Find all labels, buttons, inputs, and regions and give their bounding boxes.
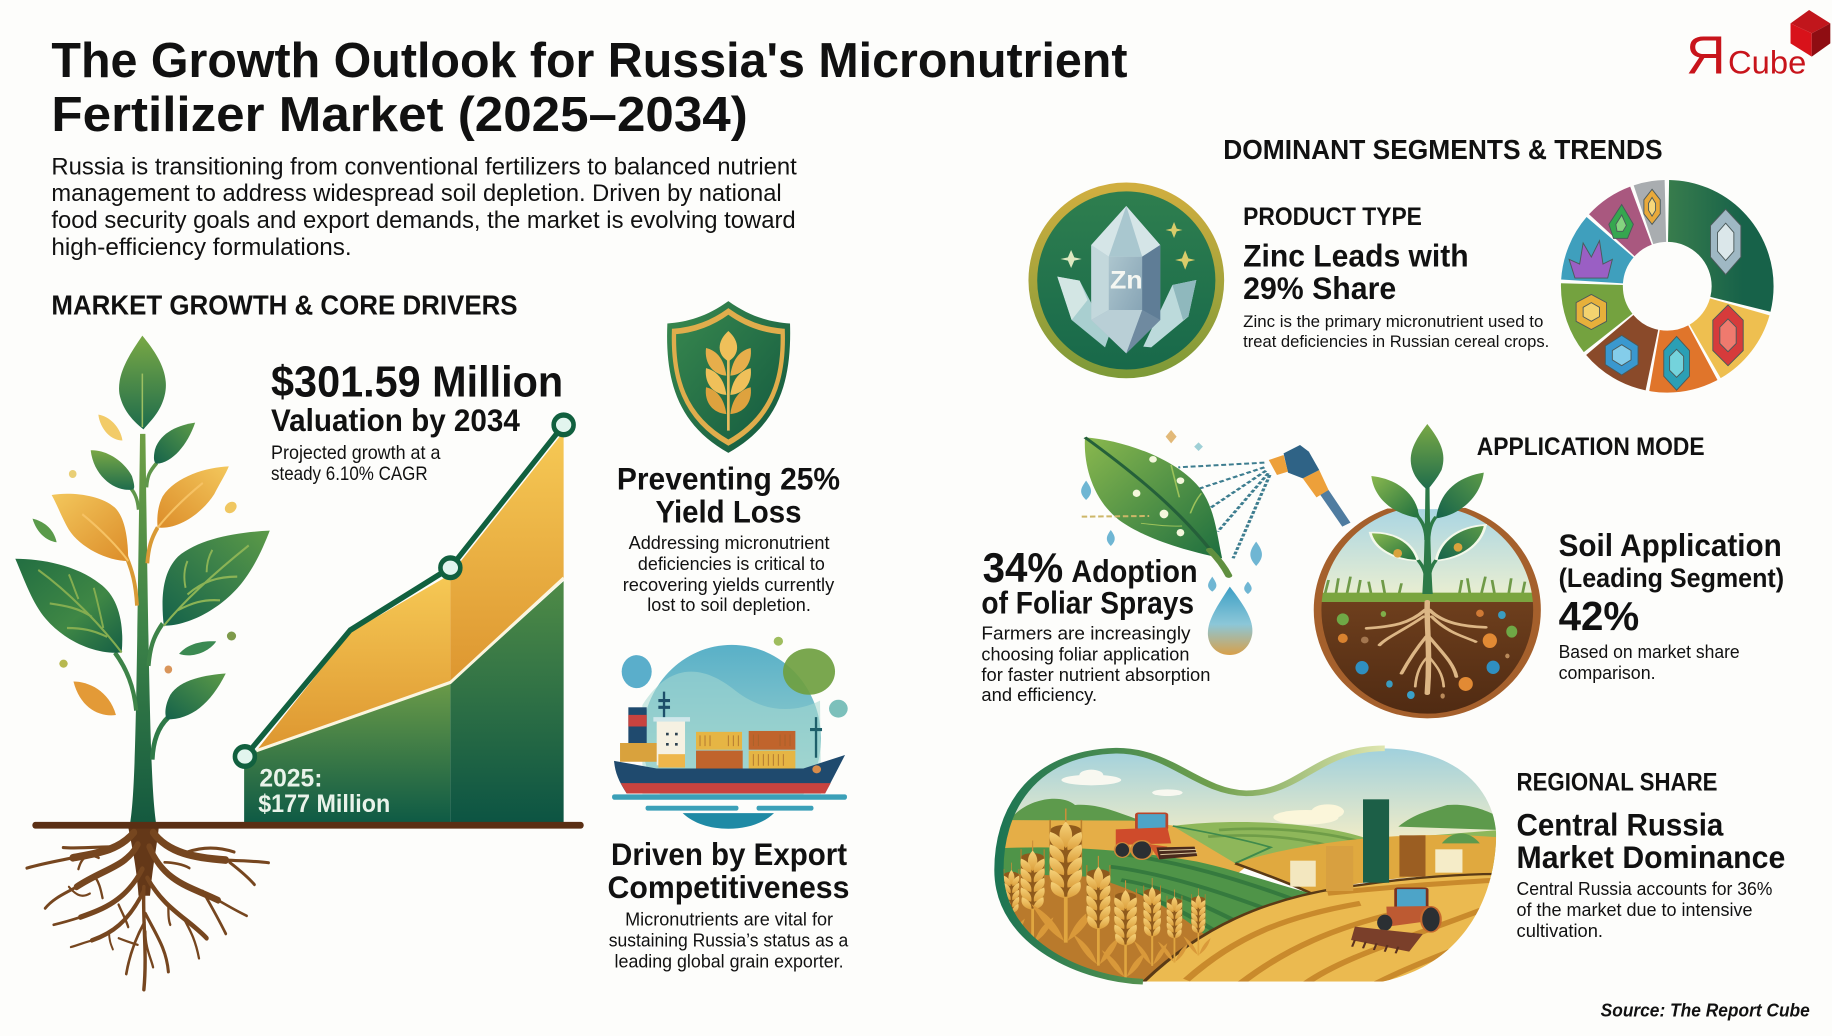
side crystals bbox=[1057, 277, 1109, 347]
plant leaves bbox=[15, 336, 270, 719]
data points bbox=[235, 415, 574, 766]
plant roots bbox=[27, 827, 269, 989]
soil plant bbox=[1370, 424, 1485, 594]
intro paragraph bbox=[51, 153, 797, 261]
logo cube icon bbox=[1791, 10, 1830, 57]
text: product type: PRODUCT TYPE bbox=[1243, 204, 1422, 231]
text: foliar spray adoption bbox=[981, 544, 1210, 705]
ship water bbox=[614, 797, 845, 829]
red tractor bbox=[1115, 813, 1197, 860]
text: product type: Zinc is the primary micronutrient used to bbox=[1243, 312, 1543, 331]
title: The Growth Outlook for Russia's Micronutrient bbox=[51, 34, 1127, 88]
chart label: 2025 value bbox=[258, 765, 390, 818]
text: regional share: of the market due to intensive bbox=[1517, 900, 1753, 920]
text: soil application: Soil Application bbox=[1559, 527, 1782, 563]
donut gems bbox=[1569, 189, 1743, 390]
farmland border bbox=[999, 748, 1385, 982]
plant stem and branches bbox=[115, 434, 168, 823]
text: foliar spray adoption: 34% bbox=[983, 544, 1063, 591]
text: foliar spray adoption: choosing foliar application bbox=[981, 645, 1189, 665]
heading: application mode: APPLICATION MODE bbox=[1477, 433, 1705, 461]
illustration: plant with roots bbox=[15, 336, 270, 989]
driver: preventing yield loss: lost to soil depletion. bbox=[647, 595, 811, 615]
donut segments bbox=[1592, 211, 1743, 362]
driver: preventing yield loss: deficiencies is critical to bbox=[638, 554, 825, 574]
growth lines bbox=[256, 578, 564, 751]
wheat ears bbox=[995, 808, 1211, 978]
callout: 301.59 million valuation: Projected growth at a bbox=[271, 443, 441, 464]
illustration: central Russia farmland bbox=[995, 747, 1499, 983]
driver: export competitiveness bbox=[608, 836, 849, 971]
text: product type: Zinc Leads with bbox=[1243, 237, 1469, 273]
text: foliar spray adoption: Farmers are increasingly bbox=[981, 624, 1192, 644]
donut chart: micronutrient product share bbox=[1569, 189, 1743, 390]
ship globe background bbox=[622, 636, 848, 794]
spray nozzle bbox=[1269, 445, 1350, 527]
area chart: market growth 2025 to 2034 bbox=[35, 415, 581, 825]
illustration: soil application cross-section bbox=[1311, 424, 1541, 717]
soil plant roots bbox=[1367, 602, 1485, 693]
text: regional share: REGIONAL SHARE bbox=[1517, 768, 1718, 796]
soil nutrient balls bbox=[1337, 610, 1517, 699]
spray mist bbox=[1178, 463, 1270, 558]
text: regional share: cultivation. bbox=[1517, 921, 1603, 941]
intro paragraph: high-efficiency formulations. bbox=[51, 234, 352, 261]
water droplets bbox=[1081, 430, 1262, 594]
chart label: 2025 value: $177 Million bbox=[258, 791, 390, 818]
driver: export competitiveness: sustaining Russia’s status as a bbox=[609, 930, 849, 950]
blue tractor bbox=[1351, 888, 1441, 953]
heading: market growth and core drivers: MARKET GROWTH & CORE DRIVERS bbox=[51, 289, 518, 320]
green base area bbox=[244, 581, 564, 823]
text: foliar spray adoption: for faster nutrient absorption bbox=[981, 665, 1210, 685]
driver: preventing yield loss: recovering yields currently bbox=[623, 575, 835, 595]
callout: 301.59 million valuation bbox=[271, 359, 563, 485]
driver: export competitiveness: Driven by Export bbox=[611, 836, 848, 872]
driver: preventing yield loss: Preventing 25% bbox=[617, 461, 840, 497]
chart label: 2025 value: 2025: bbox=[259, 765, 322, 792]
regional bars bbox=[1290, 799, 1462, 891]
text: product type: treat deficiencies in Russian cereal crops. bbox=[1243, 332, 1549, 351]
text: soil application: (Leading Segment) bbox=[1559, 563, 1784, 593]
title bbox=[51, 34, 1127, 142]
ship hull bbox=[614, 755, 845, 793]
gold growth area bbox=[256, 432, 564, 751]
callout: 301.59 million valuation: Valuation by 2034 bbox=[271, 402, 520, 438]
heading: dominant segments and trends: DOMINANT SEGMENTS & TRENDS bbox=[1223, 134, 1663, 165]
text: foliar spray adoption: and efficiency. bbox=[981, 685, 1097, 705]
intro paragraph: management to address widespread soil depletion. Driven by national bbox=[51, 180, 782, 207]
text: foliar spray adoption: Adoption bbox=[1071, 553, 1198, 589]
driver: preventing yield loss: Yield Loss bbox=[655, 493, 802, 529]
driver: preventing yield loss: Addressing micronutrient bbox=[629, 533, 830, 553]
text: regional share: Central Russia bbox=[1517, 806, 1724, 842]
main crystal bbox=[1091, 206, 1160, 353]
callout: 301.59 million valuation: steady 6.10% CAGR bbox=[271, 464, 428, 485]
text: soil application: comparison. bbox=[1559, 663, 1656, 683]
text: product type bbox=[1243, 204, 1549, 351]
text: foliar spray adoption: of Foliar Sprays bbox=[981, 584, 1194, 620]
title: Fertilizer Market (2025–2034) bbox=[51, 88, 748, 142]
driver: export competitiveness: Competitiveness bbox=[608, 869, 849, 905]
icon: zinc crystal badge: Zn bbox=[1110, 268, 1143, 295]
text: regional share: Central Russia accounts for 36% bbox=[1517, 879, 1772, 899]
sprayed leaf bbox=[1082, 437, 1229, 576]
icon: wheat shield bbox=[667, 301, 790, 453]
text: soil application: 42% bbox=[1559, 593, 1639, 639]
intro paragraph: food security goals and export demands, the market is evolving toward bbox=[51, 207, 796, 234]
soil globe bbox=[1311, 500, 1541, 717]
text: soil application bbox=[1559, 527, 1784, 683]
illustration: foliar spray leaf bbox=[1081, 430, 1350, 655]
text: regional share: Market Dominance bbox=[1517, 839, 1785, 875]
farmland scene bbox=[996, 747, 1499, 983]
driver: export competitiveness: Micronutrients are vital for bbox=[625, 909, 833, 929]
driver: export competitiveness: leading global grain exporter. bbox=[615, 951, 844, 971]
source note: Source: The Report Cube bbox=[1601, 999, 1810, 1020]
intro paragraph: Russia is transitioning from conventional fertilizers to balanced nutrient bbox=[51, 153, 797, 180]
text: regional share bbox=[1517, 768, 1785, 941]
logo: Report Cube: Cube bbox=[1728, 44, 1806, 81]
ground line bbox=[35, 818, 581, 833]
large droplet bbox=[1208, 587, 1252, 655]
logo: Report Cube bbox=[1686, 10, 1830, 86]
logo: Report Cube: Я bbox=[1686, 26, 1726, 86]
text: soil application: Based on market share bbox=[1559, 642, 1740, 662]
callout: 301.59 million valuation: $301.59 Million bbox=[271, 359, 563, 407]
ship superstructure bbox=[620, 692, 822, 769]
icon: zinc crystal badge bbox=[1033, 187, 1220, 374]
driver: preventing yield loss bbox=[617, 461, 840, 615]
icon: cargo ship bbox=[614, 637, 848, 832]
text: product type: 29% Share bbox=[1243, 270, 1396, 306]
